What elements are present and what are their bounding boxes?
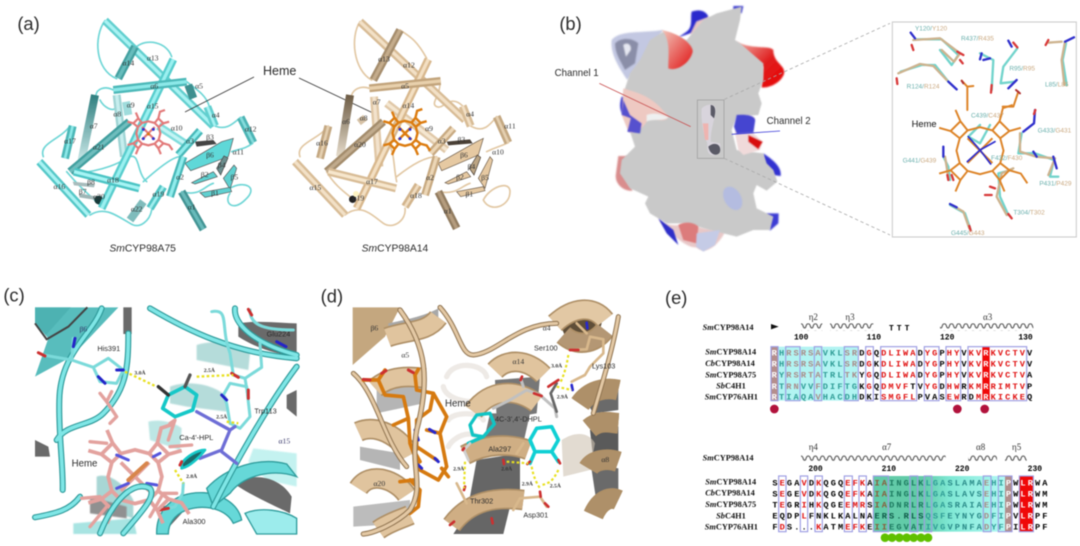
cut plane: [620, 7, 777, 237]
structure labels: β3: [206, 133, 214, 142]
species labels: SbC4H1: [716, 382, 746, 391]
helix cylinders: [295, 22, 508, 228]
labels: Heme: [72, 459, 97, 470]
structure labels: α1: [188, 203, 196, 212]
panel (c): SmCYP98A75 docking: [3, 285, 297, 534]
caption SmCYP98A75: SmCYP98A75: [109, 243, 176, 254]
secondary structure: [703, 312, 1033, 334]
labels: Asp301: [523, 510, 548, 519]
panel label (b): (b): [559, 13, 582, 34]
labels: 2.5Å: [550, 481, 562, 489]
species labels: [705, 477, 758, 531]
Heme label: Heme: [912, 119, 937, 129]
structure labels: α8: [113, 110, 121, 119]
electrostatic rim surface: [611, 6, 784, 250]
labels: α5: [401, 350, 409, 359]
labels: 3.0Å: [551, 361, 563, 369]
structure labels: β6: [206, 150, 214, 159]
residue labels: T304/T302: [1013, 210, 1045, 217]
Channel 2 arrow: [732, 131, 780, 134]
heme sticks: [939, 81, 1027, 191]
species labels: CbCYP98A14: [705, 359, 756, 368]
species labels: SmCYP98A14: [705, 348, 757, 357]
Channel 2 label: Channel 2: [767, 116, 811, 127]
tube over heme: [363, 310, 424, 534]
beta6 sheet: [35, 307, 118, 377]
secondary structure: TTT: [889, 325, 912, 334]
panel (b): channels surface: [555, 6, 890, 252]
loops: [43, 21, 253, 225]
tube over heme: [100, 486, 152, 533]
labels: Ala297: [488, 445, 511, 454]
labels: α15: [278, 436, 290, 445]
secondary structure: SmCYP98A14: [703, 453, 754, 462]
panel label (c): (c): [3, 285, 25, 306]
residue labels: G441/G439: [903, 158, 937, 165]
secondary structure: η4: [809, 442, 818, 452]
helix cylinders: [39, 21, 253, 229]
labels: 2.9Å: [522, 479, 534, 487]
residue labels: G445/G443: [951, 230, 985, 237]
heme: [383, 109, 430, 155]
hydrogen bonds: [464, 355, 572, 488]
residue markers: [881, 533, 932, 542]
residue labels: L85/L85: [1045, 82, 1069, 89]
structure labels: α7: [373, 98, 381, 107]
residue labels: R437/R435: [961, 36, 994, 43]
structure labels: α13: [147, 54, 159, 63]
secondary structure: SmCYP98A14: [703, 323, 754, 332]
structure labels: α19: [152, 190, 164, 199]
panel (e): sequence alignment block 1: [665, 287, 1034, 413]
sequence rows: RHRSRSAVKLSRDGQDLIWADYGPHYVKVRKVCTVV: [772, 348, 1034, 358]
panel (a): SmCYP98A14: [295, 22, 516, 254]
labels: 2.5Å: [204, 366, 216, 374]
labels: His391: [97, 344, 120, 353]
structure labels: α9: [425, 124, 433, 133]
sequence rows: RYRSRTATRLTKYGQDLIWADYGPHYVKVRKVCTVA: [772, 371, 1034, 381]
heme: [127, 110, 172, 154]
channel detail box: [697, 100, 724, 158]
labels: α20: [373, 479, 385, 488]
structure labels: α16: [53, 182, 65, 191]
labels: 2.0Å: [501, 465, 513, 473]
loops: [299, 22, 510, 225]
dark helix interiors: [35, 307, 297, 533]
cyan helix ribbons: [157, 462, 297, 534]
structure labels: β7: [79, 187, 87, 196]
structure labels: α12: [403, 60, 415, 69]
structure labels: α3: [438, 137, 446, 146]
structure labels: [309, 54, 516, 215]
panel (a): SmCYP98A75: [17, 13, 257, 254]
species labels: SmCYP98A14: [705, 477, 757, 486]
structure labels: α15: [147, 101, 159, 110]
secondary structure: α7: [882, 442, 892, 452]
species labels: SmCYP98A75: [705, 370, 756, 379]
structure labels: α21: [93, 142, 105, 151]
arrow to left heme: [185, 77, 254, 112]
structure labels: β5: [481, 173, 489, 182]
structure labels: α16: [316, 138, 328, 147]
residue numbers: 230: [1028, 465, 1042, 474]
structure labels: α7: [90, 121, 98, 130]
secondary structure: α3: [983, 312, 993, 322]
labels: Glu224: [267, 330, 290, 339]
residue numbers: 200: [808, 465, 823, 474]
residue sticks tan: [898, 38, 1065, 228]
sequence rows: TEGRIHKQGEEMRSIADNRLRLGASRAIAEHIPWLRWM: [772, 500, 1050, 510]
labels: Trp113: [254, 406, 277, 415]
sequence rows: RTRNVVFDIFTGKGQDMVFTVYGDHWRKMRRIMTVP: [772, 382, 1034, 392]
species labels: CbCYP98A14: [705, 489, 756, 498]
residue numbers: 210: [882, 465, 896, 474]
panel (d): SmCYP98A14 docking: [321, 286, 618, 534]
structure labels: [53, 54, 257, 214]
secondary structure: α8: [976, 442, 986, 452]
structure labels: β4: [218, 160, 226, 169]
residue labels: G433/G431: [1038, 127, 1072, 134]
labels: 4C-3',4'-DHPL: [495, 415, 542, 424]
structure labels: β5: [230, 173, 238, 182]
structure labels: α18: [410, 191, 422, 200]
structure labels: α15: [309, 183, 321, 192]
residue labels: Y120/Y120: [915, 26, 947, 33]
structure labels: β1: [465, 190, 473, 199]
structure labels: α11: [233, 147, 244, 156]
structure labels: α3: [186, 137, 194, 146]
ghost helix: [443, 365, 490, 447]
Channel 1 arrow: [599, 83, 691, 127]
heme callout label: Heme: [263, 64, 296, 78]
labels: β6: [370, 324, 378, 333]
labels: 2.9Å: [453, 465, 465, 473]
labels: α4: [543, 324, 551, 333]
hetero atoms: [897, 33, 1074, 231]
labels: α8: [601, 455, 609, 464]
beta sheets: [73, 138, 237, 204]
structure labels: α17: [64, 136, 76, 145]
species labels: SmCYP98A75: [705, 500, 756, 509]
structure labels: α1: [444, 206, 452, 215]
structure labels: α5: [401, 81, 409, 90]
sequence rows: RHRSRSAVKLSRDGKDLIWADYGPHYVKVRKVCTVV: [772, 359, 1034, 369]
residue numbers: [808, 465, 1042, 474]
residue sticks: [457, 323, 603, 510]
species labels: SmCYP76AH1: [705, 522, 758, 531]
residue labels: R95/R95: [1009, 66, 1035, 73]
panel (e): sequence alignment block 2: [703, 442, 1050, 542]
panel label (d): (d): [321, 286, 343, 307]
residue numbers: 220: [955, 465, 970, 474]
structure labels: α5: [195, 81, 203, 90]
labels: 2.9Å: [557, 392, 569, 400]
sequence rows: [772, 478, 1050, 533]
pale background helices: [73, 342, 297, 534]
residue markers: [770, 405, 989, 413]
similarity boxes: [779, 476, 1033, 532]
residue labels: P431/P429: [1039, 181, 1072, 188]
structure labels: α4: [212, 110, 220, 119]
labels: β6: [79, 325, 87, 334]
conservation shading: [771, 347, 990, 401]
residue numbers: 120: [940, 333, 955, 342]
heme callout label: [185, 64, 373, 113]
species labels: [705, 348, 758, 402]
labels: 3.0Å: [134, 368, 146, 376]
structure labels: α14: [122, 59, 134, 68]
labels: Heme: [445, 398, 471, 409]
tan helix bands: [358, 310, 618, 530]
similarity boxes: [771, 347, 1027, 401]
structure labels: α6: [342, 117, 350, 126]
dashed zoom lines: [724, 23, 890, 235]
structure labels: α8: [360, 113, 368, 122]
structure labels: α6: [150, 81, 158, 90]
structure labels: β1: [211, 189, 219, 198]
secondary structure: η3: [845, 312, 855, 322]
structure labels: α22: [131, 205, 143, 214]
structure labels: β3: [457, 135, 465, 144]
residue sticks teal: [901, 39, 1067, 230]
labels: Thr302: [470, 497, 493, 506]
helix interiors: [353, 308, 618, 534]
residue sticks: [43, 310, 293, 510]
residue hetero atoms: [450, 323, 587, 525]
structure labels: α19: [352, 194, 364, 203]
labels: Ca-4'-HPL: [179, 433, 213, 442]
residue numbers: 130: [1018, 333, 1033, 342]
sequence rows: RTIAQAVHACDHDKISMGFLPVASEWRDMRKICKEQ: [772, 393, 1034, 403]
structure labels: β6: [460, 151, 468, 160]
ligand Ca-4'-HPL: [158, 375, 237, 468]
structure labels: β2: [456, 173, 464, 182]
structure labels: α10: [492, 147, 504, 156]
structure labels: α13: [378, 54, 390, 63]
surface cavities: [622, 30, 763, 252]
labels: [370, 324, 615, 519]
secondary structure: η2: [809, 312, 818, 322]
secondary structure: η5: [1012, 442, 1022, 452]
structure labels: β2: [201, 170, 209, 179]
heme hetero atoms: [363, 370, 438, 468]
secondary structure: [703, 442, 1027, 462]
species labels: SbC4H1: [716, 511, 746, 520]
conservation shading: [873, 476, 1033, 532]
structure labels: α14: [402, 101, 414, 110]
residue hetero atoms: [38, 309, 286, 510]
labels: 2.5Å: [216, 412, 228, 420]
residue numbers: 100: [794, 333, 809, 342]
heme sticks: [363, 369, 448, 513]
panel label (e): (e): [665, 287, 687, 308]
structure labels: α2: [176, 173, 184, 182]
sequence rows: EQDPLFNKLKALNAERS.RLSQSFEYNYGDFIPVLRPF: [772, 512, 1050, 522]
residue labels: C439/C437: [971, 113, 1004, 120]
labels: Lys103: [592, 362, 615, 371]
structure labels: α4: [466, 109, 474, 118]
caption SmCYP98A14: SmCYP98A14: [362, 243, 429, 254]
Channel 1 label: Channel 1: [555, 68, 599, 79]
labels: 2.8Å: [186, 472, 198, 480]
labels: Ala300: [183, 517, 205, 526]
structure labels: α9: [127, 101, 135, 110]
panel (b) inset: active-site residues: [892, 22, 1076, 237]
residue numbers: [794, 333, 1033, 342]
structure labels: β4: [467, 162, 475, 171]
heme sticks: [82, 392, 192, 527]
panel label (a): (a): [17, 13, 40, 34]
residue labels: R124/R124: [907, 83, 940, 90]
species labels: SmCYP76AH1: [705, 393, 758, 402]
structure labels: α17: [366, 177, 378, 186]
sequence rows: SEGEVDKQGQEFKAIAINGLKLGASLAVSEHIPWLRWM: [772, 489, 1050, 499]
arrow to right heme: [299, 78, 373, 113]
residue labels: [903, 26, 1072, 237]
sequence rows: SEGAVDKQGQEFKAIAINGLKLGASLAMAEHIPWLRWA: [772, 478, 1050, 488]
structure labels: α12: [245, 124, 257, 133]
labels: [72, 325, 290, 526]
structure labels: α20: [354, 140, 366, 149]
structure labels: α20: [93, 192, 105, 201]
hydrogen bonds: [125, 372, 238, 483]
sequence rows: [772, 348, 1034, 403]
cyan ribbons: [35, 308, 297, 517]
residue numbers: 110: [867, 333, 881, 342]
labels: α14: [512, 357, 524, 366]
structure labels: α10: [171, 124, 183, 133]
loops: [353, 307, 618, 467]
structure labels: β8: [87, 178, 95, 187]
structure labels: α11: [504, 122, 516, 131]
sequence rows: FDS...KATMEFKEIIEGVATIVGVPNFADYFPILRPF: [772, 523, 1050, 533]
residue labels: F432/F430: [991, 155, 1023, 162]
ligand 4C-3',4'-DHPL: [463, 377, 560, 464]
inset frame: [892, 22, 1076, 237]
beta sheets: [349, 138, 493, 203]
beta6 sheet: [353, 307, 400, 365]
structure labels: α18: [107, 175, 119, 184]
labels: Ser100: [534, 344, 558, 353]
structure labels: α2: [426, 173, 434, 182]
